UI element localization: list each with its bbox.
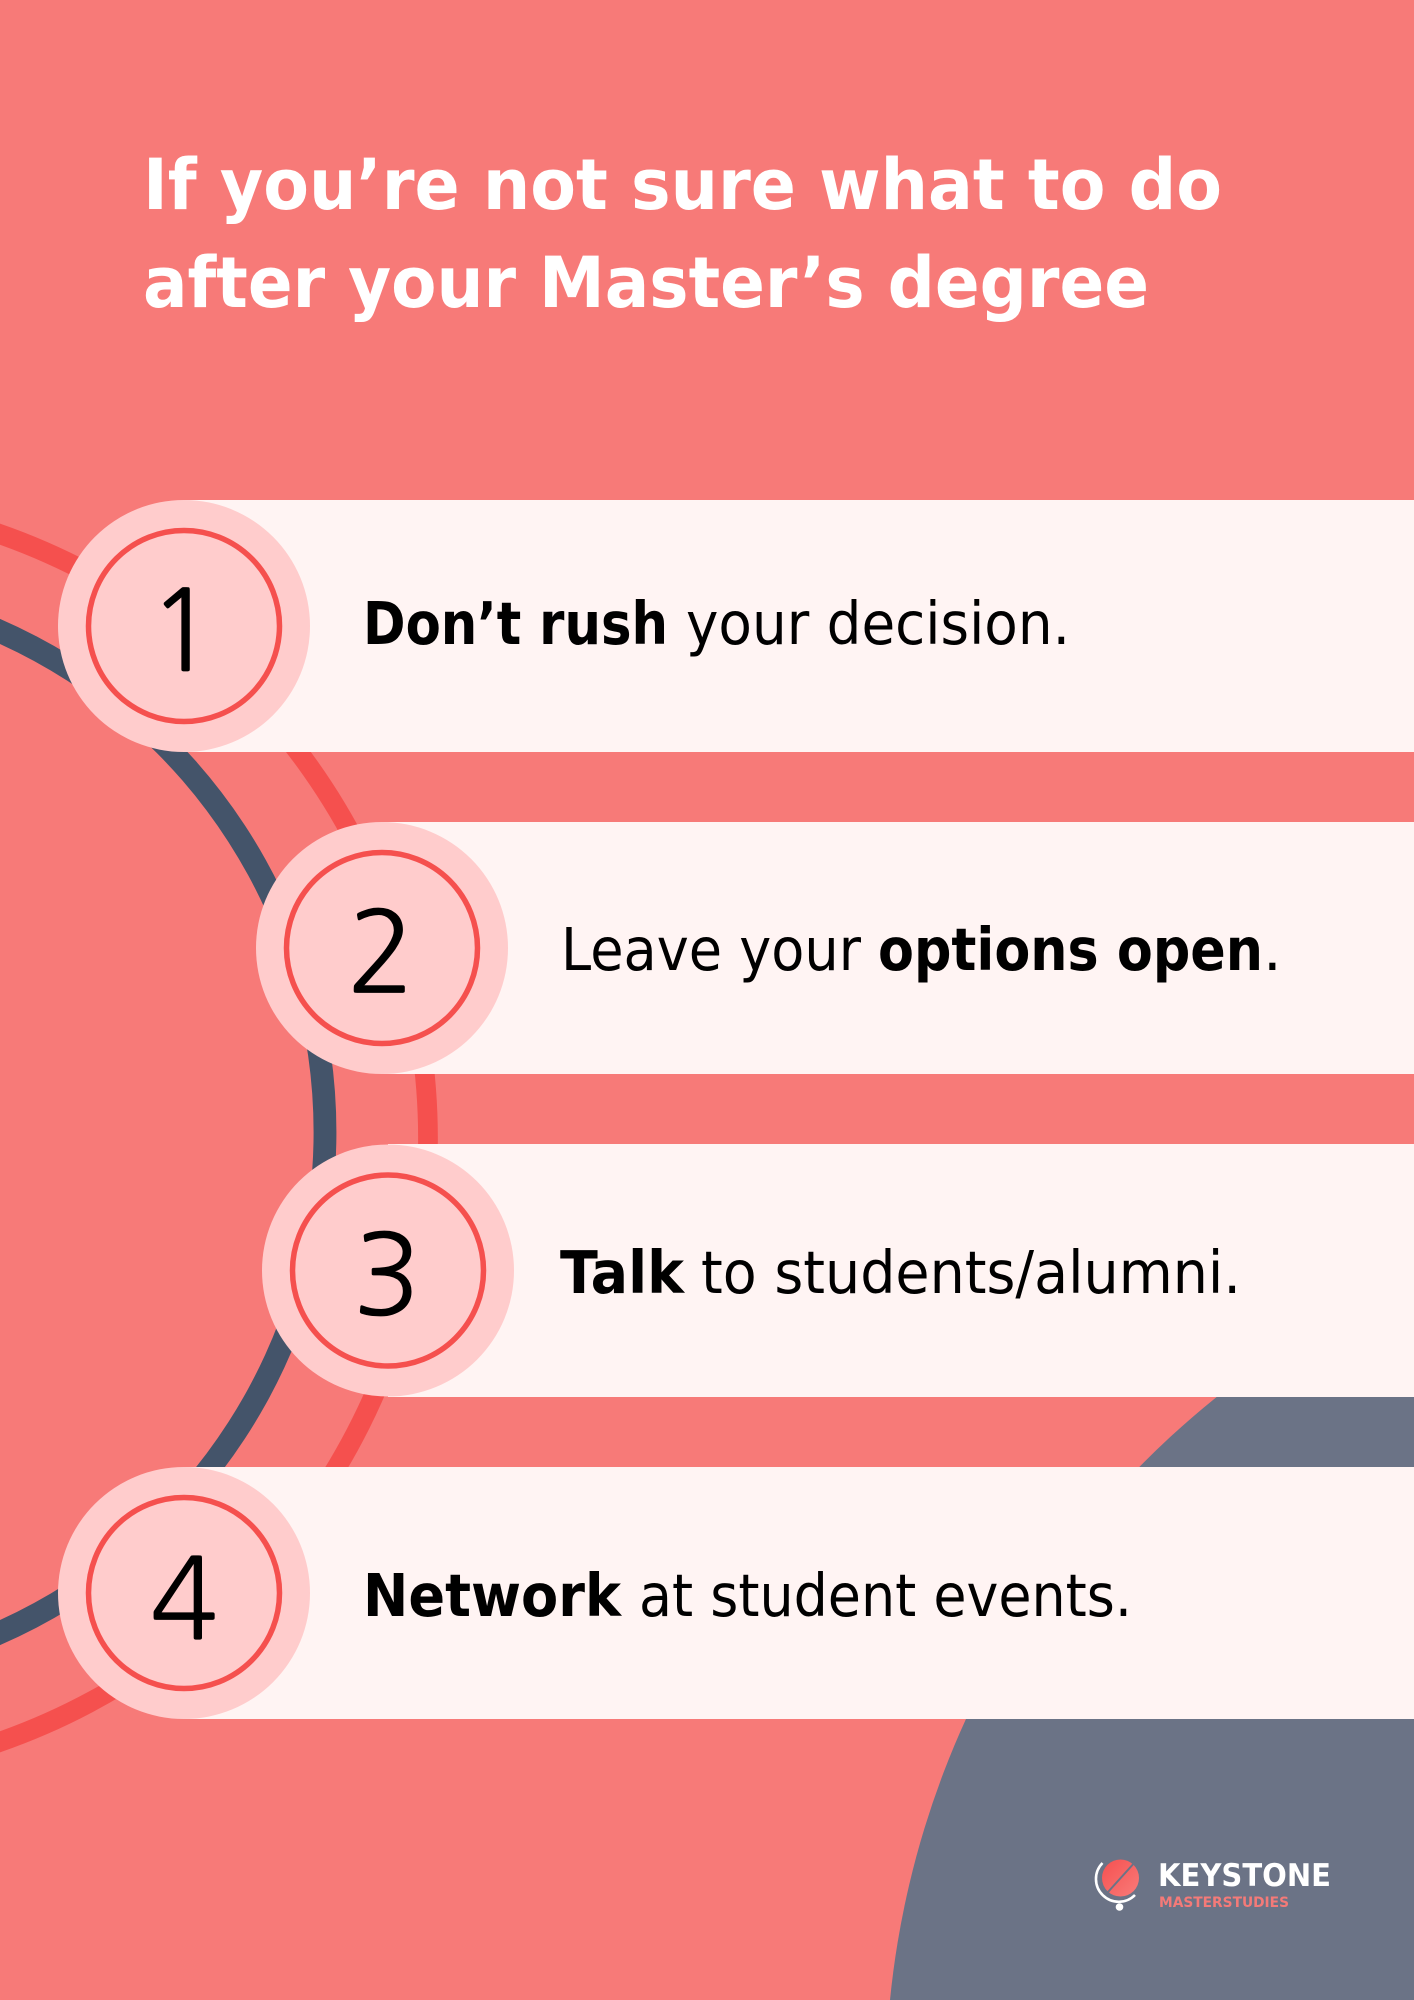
step 2 badge: 2 xyxy=(347,897,415,1009)
arc: outer red ring xyxy=(0,524,438,1752)
step 4 panel xyxy=(58,1467,1414,1719)
step 1 text: your decision. xyxy=(686,589,1070,658)
step 2 badge xyxy=(256,822,508,1074)
step 3 badge: 3 xyxy=(353,1220,421,1332)
step 2 text: options open xyxy=(878,915,1263,984)
step 3 badge xyxy=(262,1144,514,1396)
step 3 text: Talk xyxy=(560,1238,686,1307)
logo wordmark: KEYSTONE xyxy=(1158,1858,1331,1894)
step 1 badge: 1 xyxy=(148,576,216,688)
step 4 badge xyxy=(58,1467,310,1719)
icon: globe xyxy=(1096,1860,1139,1911)
step 2 text: Leave your xyxy=(561,915,862,984)
step 4 text: Network xyxy=(363,1561,623,1630)
arc: inner navy ring xyxy=(0,619,336,1645)
title: If you’re not sure what to do xyxy=(143,144,1222,226)
logo sub-wordmark: MASTERSTUDIES xyxy=(1159,1895,1289,1911)
title xyxy=(143,144,1222,324)
step 4 badge: 4 xyxy=(150,1544,218,1656)
step 3 panel xyxy=(262,1144,1414,1397)
step 2 panel xyxy=(256,822,1414,1074)
step 1 badge xyxy=(58,500,310,752)
step 1 panel xyxy=(58,500,1414,752)
title: after your Master’s degree xyxy=(143,242,1149,324)
step 1 text: Don’t rush xyxy=(363,589,668,658)
logo: Keystone Masterstudies xyxy=(1096,1858,1331,1911)
step 3 text: to students/alumni. xyxy=(701,1238,1241,1307)
corner shape: grey circle bottom right xyxy=(890,1277,1414,2000)
step 4 text: at student events. xyxy=(639,1561,1132,1630)
step 2 text: . xyxy=(1263,915,1282,984)
